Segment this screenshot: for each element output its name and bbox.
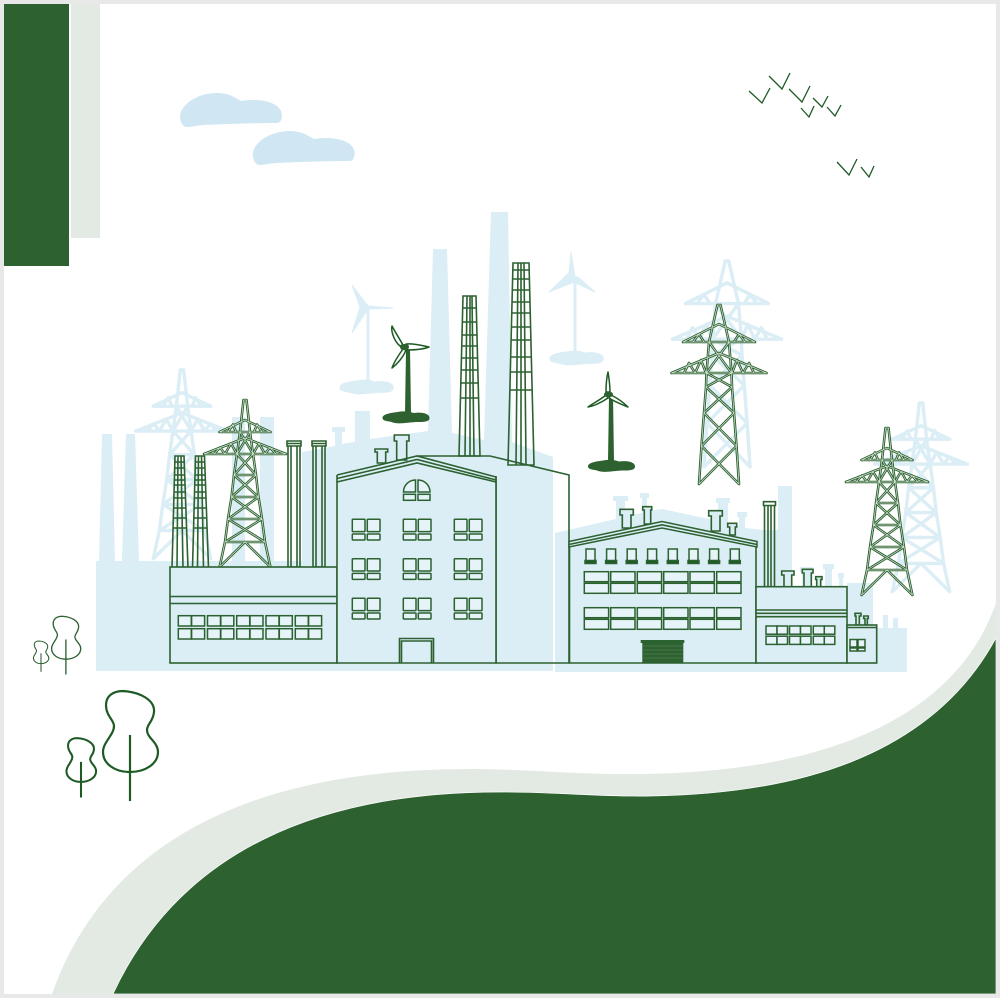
pale background skyline [96, 212, 907, 672]
left low building [170, 567, 337, 663]
tall smokestack: middle [458, 295, 481, 457]
trees: upper pair [33, 616, 81, 675]
pale pylons [136, 261, 967, 592]
pale wind turbines [340, 252, 603, 394]
green pylon: centre [672, 305, 766, 484]
pale green wave [52, 603, 996, 994]
dark wind turbine: left [382, 326, 430, 423]
narrow stack: left [171, 455, 189, 566]
narrow stack: second [192, 455, 210, 566]
annex chimneys [782, 569, 868, 625]
corner block: green band [4, 4, 69, 266]
right building chimneys [620, 507, 737, 535]
right building [569, 522, 757, 663]
green pylon: right [846, 428, 928, 595]
dark green wave [113, 638, 996, 994]
green pylon: left [204, 400, 286, 567]
tall smokestack: right [507, 262, 535, 466]
flock of birds [749, 73, 874, 177]
annex pipe [764, 502, 776, 586]
trees: lower pair [66, 691, 158, 801]
main building side wall [417, 456, 569, 663]
fluted pipes [287, 441, 326, 567]
main building roof chimneys [375, 435, 409, 463]
garage door [641, 640, 684, 663]
small side annex [847, 625, 877, 663]
clouds [180, 93, 355, 165]
corner block: pale band [71, 4, 100, 238]
main building front [337, 456, 496, 663]
dark wind turbine: right [588, 372, 635, 472]
annex building [756, 587, 847, 663]
